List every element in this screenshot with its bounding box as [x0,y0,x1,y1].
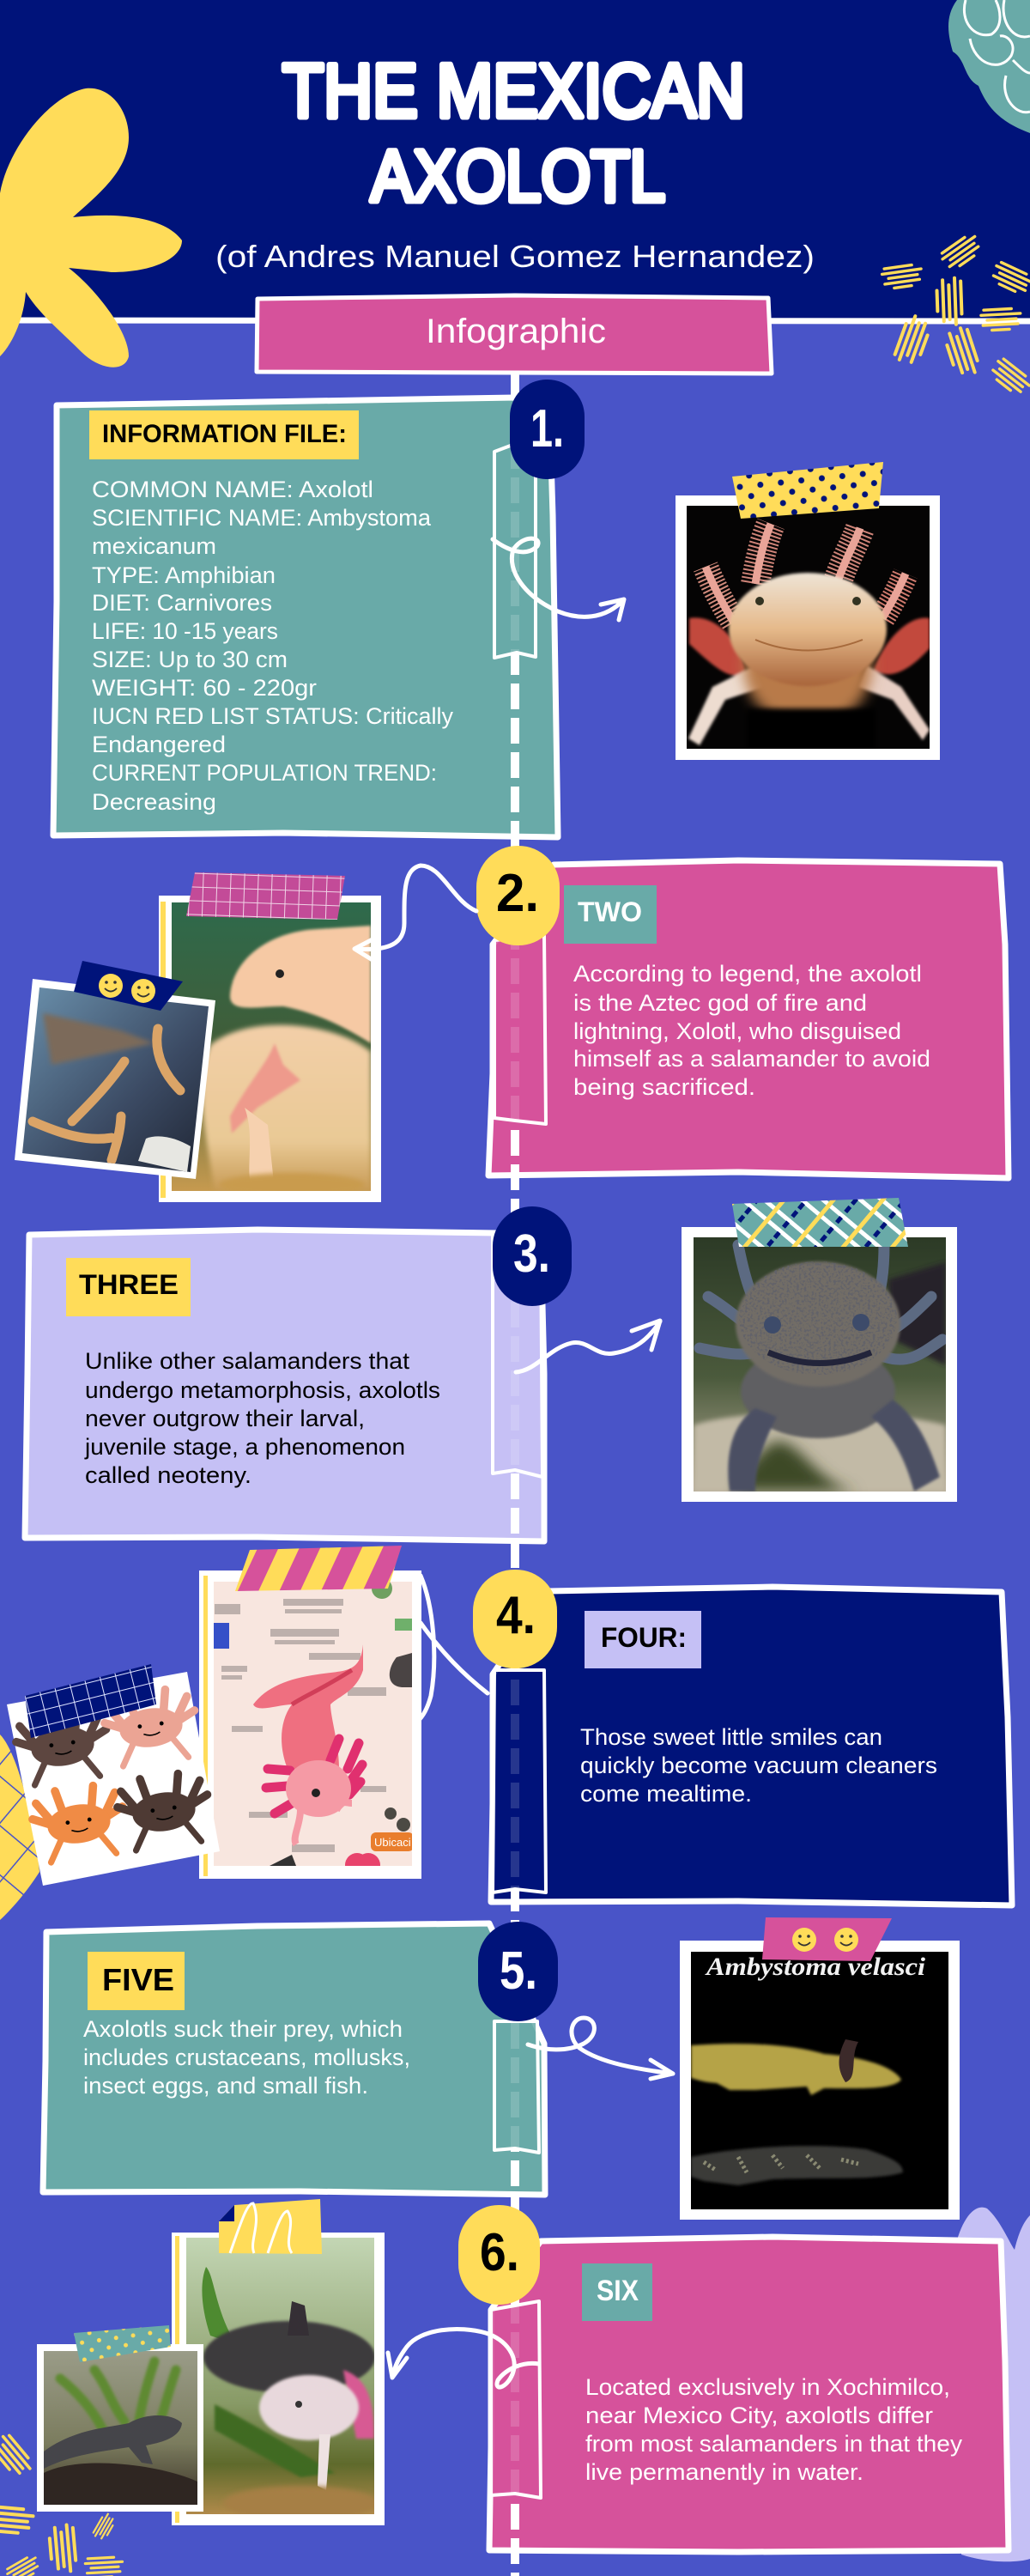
header divider line [0,320,1030,321]
number badge one [510,380,585,479]
title [282,48,745,216]
photo: ambystoma velasci [680,1917,960,2220]
text: neoteny [84,1348,440,1488]
panel: information file background [53,398,558,837]
washi tape: yellow swirl [219,2199,322,2254]
label: four [585,1611,701,1668]
decoration: teal scalloped blob [948,0,1030,133]
section 2 [15,846,930,1202]
number badge three: 3. [513,1224,550,1284]
subtitle: (of Andres Manuel Gomez Hernandez) [215,239,815,274]
decoration: yellow scribbles bottom left [0,2433,123,2576]
text: legend: is the Aztec god of fire and [573,990,867,1016]
header band [0,0,1030,320]
number badge two: 2. [496,864,539,923]
text: information list: TYPE: Amphibian [92,562,276,588]
number badge two [476,846,560,945]
label: information file: INFORMATION FILE: [102,420,347,448]
text: information list [92,477,454,815]
timeline: dashed vertical line [511,374,519,2576]
text: information list: DIET: Carnivores [92,590,272,616]
text: prey: insect eggs, and small fish. [83,2073,368,2099]
text: information list: COMMON NAME: Axolotl [92,477,373,502]
text: neoteny: Unlike other salamanders that [85,1348,410,1374]
text: vacuum cleaners: quickly become vacuum cleaners [580,1753,937,1778]
number badge four [473,1570,557,1668]
text: information list: WEIGHT: 60 - 220gr [92,675,317,701]
label: two: TWO [578,896,642,927]
arrow one [493,538,624,620]
decoration: yellow flower [0,88,182,368]
decoration: lavender flower behind panel six [954,2208,1030,2561]
text: information list: Endangered [92,732,226,757]
text: legend: lightning, Xolotl, who disguised [573,1018,901,1044]
label: five [88,1952,185,2010]
label: five: FIVE [102,1962,174,1997]
arrow three [516,1321,660,1372]
title: AXOLOTL [371,136,665,216]
text: xochimilco: Located exclusively in Xochimilco, [585,2374,950,2400]
text: information list: IUCN RED LIST STATUS: Critically [92,703,454,729]
timeline strip one [494,444,536,658]
label: four: FOUR: [601,1622,687,1653]
panel: two background [488,860,1009,1178]
text: xochimilco: near Mexico City, axolotls differ [585,2403,933,2428]
photo: dark axolotl with tape [682,1198,957,1502]
text: legend [573,961,930,1100]
washi tape: pink and yellow stripes [235,1546,402,1591]
section 4 [7,1546,937,1886]
washi tape: teal dots [74,2325,171,2362]
photo: small salamander on rock [37,2325,203,2512]
panel: four background [491,1587,1012,1905]
text: information list: Decreasing [92,789,216,815]
number badge four: 4. [496,1586,536,1645]
decoration: yellow scribbles top right [882,233,1030,398]
text: neoteny: called neoteny. [85,1462,251,1488]
text: legend: According to legend, the axolotl [573,961,922,987]
photo: pale axolotl with tape [676,462,940,760]
washi tape: pink with smileys [762,1917,892,1961]
label: six: SIX [597,2275,639,2307]
timeline strip six [491,2301,541,2498]
timeline strip three [493,1236,542,1477]
photo: large peach axolotl with tape [15,866,476,1202]
number badge five [478,1922,558,2021]
label: two [564,885,657,944]
text: neoteny: undergo metamorphosis, axolotls [85,1377,440,1403]
arrow six [388,2329,539,2387]
decoration: yellow lattice leaf at left edge [0,1735,39,1920]
text: xochimilco: from most salamanders in that they [585,2431,963,2457]
photo: poster with pink axolotl: Ubicaci [374,1836,411,1849]
text: information list: mexicanum [92,533,216,559]
text: prey: includes crustaceans, mollusks, [83,2044,410,2070]
text: xochimilco [585,2374,963,2485]
photo: small tilted tank [15,961,215,1179]
timeline strip two [494,936,546,1124]
washi tape: navy grid [25,1664,156,1738]
label: information file [89,410,359,459]
text: information list: LIFE: 10 -15 years [92,618,278,644]
text: information list: CURRENT POPULATION TREND: [92,760,437,786]
arrow four [417,1576,488,1722]
arrow five [528,2018,673,2079]
text: information list: SCIENTIFIC NAME: Ambystoma [92,505,431,531]
panel: five background [43,1923,545,2195]
timeline strip five [494,2021,539,2153]
text: xochimilco: live permanently in water. [585,2459,863,2485]
number badge six [458,2205,540,2305]
arrow two [354,866,476,960]
photo: poster with pink axolotl [199,1546,421,1879]
text: prey: Axolotls suck their prey, which [83,2016,403,2042]
banner: Infographic [426,313,606,350]
panel: three background [25,1230,544,1541]
text: neoteny: juvenile stage, a phenomenon [84,1434,405,1460]
washi tape: pink grid [186,872,345,920]
label: three: THREE [79,1269,179,1300]
label: six [582,2263,652,2321]
photo: tilted cartoon axolotls sticker [7,1664,220,1886]
washi tape: plaid [732,1198,908,1247]
washi tape: yellow dots [732,462,883,519]
text: vacuum cleaners: come mealtime. [580,1781,752,1807]
number badge five: 5. [500,1941,537,2001]
text: vacuum cleaners [580,1724,937,1807]
text: information list: SIZE: Up to 30 cm [92,647,288,672]
text: legend: being sacrificed. [573,1074,755,1100]
number badge six: 6. [480,2223,519,2282]
text: neoteny: never outgrow their larval, [85,1406,365,1431]
banner [257,295,772,374]
photo: ambystoma velasci: Ambystoma velasci [705,1953,926,1981]
timeline strip four [493,1670,546,1893]
number badge one: 1. [530,399,564,459]
text: legend: himself as a salamander to avoid [573,1046,930,1072]
photo: dark and pink axolotls [37,2199,385,2525]
panel: six background [489,2237,1009,2552]
title: THE MEXICAN [282,48,745,133]
number badge three [493,1206,572,1306]
washi tape: navy with smileys [74,961,183,1011]
section 6 [37,2199,963,2525]
label: three [66,1258,191,1316]
section 1 [89,380,940,815]
text: vacuum cleaners: Those sweet little smiles can [580,1724,882,1750]
text: prey [83,2016,410,2099]
section 5 [83,1917,960,2220]
section 3 [66,1198,957,1502]
